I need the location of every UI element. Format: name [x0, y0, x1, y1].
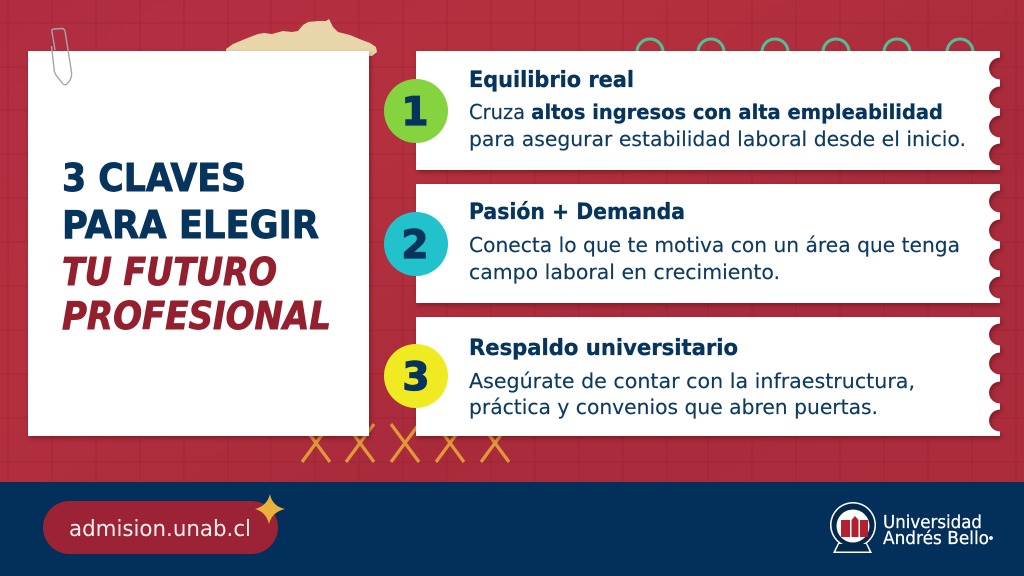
heading: equilibrio real: Equilibrio real	[469, 68, 634, 93]
title: TU FUTURO	[62, 250, 277, 294]
badge: number 2	[384, 212, 448, 276]
text: card 2 body	[469, 233, 960, 284]
decoration: green rings	[637, 39, 973, 65]
icon: paperclip	[52, 28, 72, 85]
title	[62, 156, 331, 338]
text: card 1 body: Cruza altos ingresos con alta empleabilidad	[469, 100, 943, 124]
icon: gold sparkle	[255, 494, 285, 524]
badge: number 3	[384, 344, 448, 408]
panel: card 3	[416, 317, 1000, 436]
button: website: admision.unab.cl	[69, 516, 251, 542]
text: card 3 body: Asegúrate de contar con la infraestructura,	[469, 369, 915, 393]
text: logo wordmark: Andrés Bello	[883, 529, 989, 549]
badge: number 3: 3	[402, 355, 430, 400]
heading: pasion + demanda: Pasión + Demanda	[469, 200, 685, 225]
text: card 2 body: Conecta lo que te motiva con un área que tenga	[469, 233, 960, 257]
text: logo wordmark: Universidad	[883, 513, 982, 533]
badge: number 1	[384, 79, 448, 143]
title: 3 CLAVES	[62, 156, 246, 200]
panel: card 2	[416, 184, 1000, 303]
heading: respaldo universitario: Respaldo universitario	[469, 336, 738, 361]
title: PROFESIONAL	[62, 294, 331, 338]
text: card 2 body: campo laboral en crecimiento.	[469, 260, 780, 284]
icon: university crest	[830, 502, 876, 553]
text: card 3 body: práctica y convenios que abren puertas.	[469, 395, 878, 419]
badge: number 1: 1	[401, 90, 429, 135]
text: card 1 body: para asegurar estabilidad laboral desde el inicio.	[469, 127, 966, 151]
title: PARA ELEGIR	[62, 203, 319, 247]
decoration: torn paper	[226, 19, 377, 56]
text: card 1 body	[469, 100, 966, 151]
panel: card 1	[416, 51, 1000, 170]
panel: title card	[28, 51, 369, 436]
badge: number 2: 2	[401, 223, 429, 268]
button: website	[43, 501, 278, 554]
text: card 3 body	[469, 369, 915, 419]
text: logo wordmark	[883, 513, 993, 549]
logo: universidad andres bello	[830, 502, 993, 553]
decoration: orange x marks	[302, 424, 509, 462]
footer band	[0, 482, 1024, 576]
